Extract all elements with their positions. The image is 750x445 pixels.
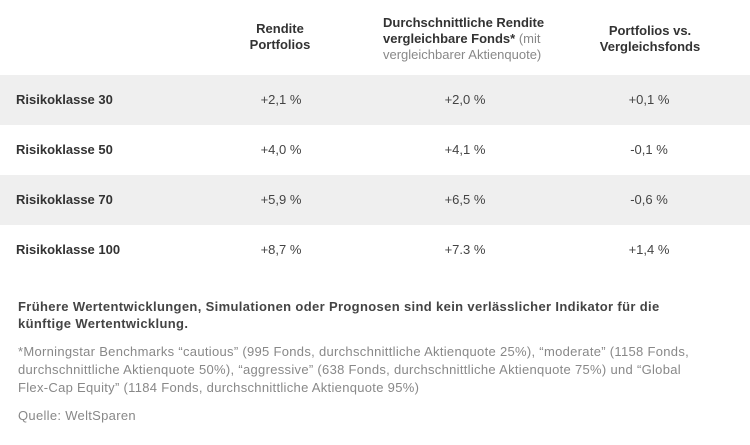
row: Risikoklasse 50: +4,1 %	[445, 142, 485, 157]
row: Risikoklasse 30: Risikoklasse 30	[16, 92, 113, 107]
header: Rendite Portfolios: Rendite	[256, 21, 304, 36]
row: Risikoklasse 100: Risikoklasse 100	[16, 242, 120, 257]
row: Risikoklasse 100	[16, 242, 669, 257]
disclaimer: künftige Wertentwicklung.	[18, 316, 188, 331]
header: Durchschnittliche Rendite: Durchschnittliche Rendite	[383, 15, 544, 30]
row: Risikoklasse 70: -0,6 %	[630, 192, 668, 207]
footnote: *Morningstar Benchmarks “cautious” (995 Fonds, durchschnittliche Aktienquote 25%), “moderate” (1158 Fonds,	[18, 344, 689, 359]
row: Risikoklasse 50	[16, 142, 668, 157]
row: Risikoklasse 70: Risikoklasse 70	[16, 192, 113, 207]
row: Risikoklasse 30: +0,1 %	[629, 92, 669, 107]
row: Risikoklasse 70: +6,5 %	[445, 192, 485, 207]
footnote: Flex-Cap Equity” (1184 Fonds, durchschnittliche Aktienquote 95%)	[18, 380, 419, 395]
header: Durchschnittliche Rendite: vergleichbare Fonds* (mit	[383, 31, 540, 46]
row: Risikoklasse 50: Risikoklasse 50	[16, 142, 113, 157]
header: Durchschnittliche Rendite: vergleichbarer Aktienquote)	[383, 47, 541, 62]
row: Risikoklasse 100: +7.3 %	[445, 242, 485, 257]
header: Rendite Portfolios: Portfolios	[250, 37, 310, 52]
row: Risikoklasse 30: +2,1 %	[261, 92, 301, 107]
row: Risikoklasse 100: +1,4 %	[629, 242, 669, 257]
disclaimer	[18, 299, 660, 331]
footnote: durchschnittliche Aktienquote 50%), “aggressive” (638 Fonds, durchschnittliche Aktienquote 75%) und “Global	[18, 362, 681, 377]
row: Risikoklasse 70: +5,9 %	[261, 192, 301, 207]
footnote	[18, 344, 689, 395]
row: Risikoklasse 50: -0,1 %	[630, 142, 668, 157]
row: Risikoklasse 100: +8,7 %	[261, 242, 301, 257]
header: Portfolios vs. Vergleichsfonds: Vergleichsfonds	[600, 39, 700, 54]
row: Risikoklasse 50: +4,0 %	[261, 142, 301, 157]
header: Portfolios vs. Vergleichsfonds	[600, 23, 700, 54]
row: Risikoklasse 30: +2,0 %	[445, 92, 485, 107]
source: Quelle: WeltSparen	[18, 408, 136, 423]
header: Portfolios vs. Vergleichsfonds: Portfolios vs.	[609, 23, 691, 38]
disclaimer: Frühere Wertentwicklungen, Simulationen oder Prognosen sind kein verlässlicher Indikator für die	[18, 299, 660, 314]
row: Risikoklasse 70	[0, 175, 750, 225]
header: Rendite Portfolios	[250, 21, 310, 52]
header: Durchschnittliche Rendite	[383, 15, 544, 62]
row: Risikoklasse 30	[0, 75, 750, 125]
